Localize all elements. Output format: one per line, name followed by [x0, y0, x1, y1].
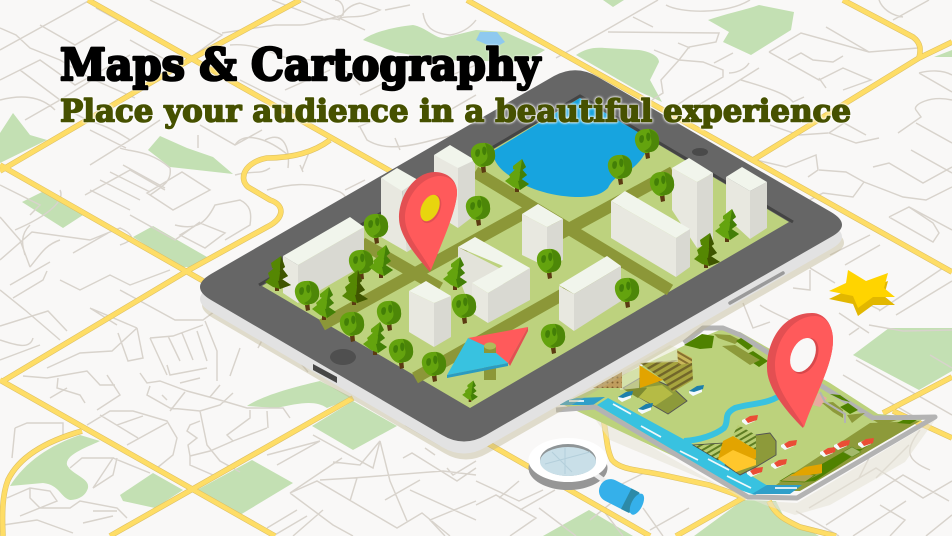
map land: [562, 330, 925, 492]
tablet home button: [330, 349, 356, 365]
star: [829, 270, 895, 316]
map dark green field: [804, 443, 872, 482]
map gray border road: [556, 328, 935, 498]
building: center small: [522, 204, 563, 267]
map coastal blue band: [597, 398, 768, 495]
building: front square: [409, 281, 451, 347]
tablet device: [200, 70, 844, 460]
map coastal blue corner: [752, 485, 802, 494]
title: Maps & Cartography: [60, 40, 541, 91]
tablet screen bevel: [259, 96, 793, 285]
map blue-roof houses: [618, 385, 704, 414]
paper map shadow on the ground: [590, 412, 935, 515]
building: tower far right: [726, 167, 767, 239]
map field block one: [620, 345, 693, 414]
map bottom-right olive land: [768, 421, 920, 491]
building: tall tower right: [672, 158, 713, 248]
tablet shadow: [202, 88, 844, 460]
map red-roof houses: [742, 415, 874, 477]
round trees: [295, 129, 674, 382]
map orange field: [790, 464, 822, 476]
map river: [684, 392, 785, 441]
map striped field: [780, 473, 815, 482]
compass blue edge: [447, 363, 508, 378]
compass hub: [484, 342, 496, 353]
building: tower left of pin: [381, 168, 418, 252]
building: L-shaped: [458, 237, 530, 323]
map white dashes: [569, 401, 797, 488]
lens glass: [540, 447, 596, 476]
compass red needle: [468, 327, 528, 363]
tablet screen land: [262, 98, 789, 408]
map top garden parcels: [684, 334, 917, 425]
tablet volume button: [730, 273, 783, 303]
building: long left: [283, 217, 364, 303]
building: long right: [611, 191, 690, 277]
subtitle: Place your audience in a beautiful experience: [60, 94, 851, 130]
map pin on tablet: [399, 172, 457, 272]
lens rim: [528, 438, 608, 482]
stem: [592, 472, 606, 482]
map coastal blue top: [560, 397, 605, 405]
building: front long: [559, 256, 621, 331]
map field block two: [693, 425, 776, 475]
compass red edge: [508, 327, 528, 366]
magnifying glass: [528, 438, 647, 517]
buildings back row: [283, 145, 767, 347]
tablet face: [200, 70, 842, 442]
compass: [447, 327, 528, 380]
building: tower behind pin: [434, 145, 475, 228]
large map pin: [767, 313, 833, 428]
handle: [595, 475, 647, 517]
compass post: [484, 360, 496, 380]
map brown dotted field: [593, 372, 622, 388]
lens rim side: [528, 446, 608, 490]
tablet side: [200, 82, 842, 454]
small pond: [476, 32, 505, 47]
lens reflected streets: [545, 448, 590, 474]
tablet side slot: [313, 364, 337, 383]
lake: [493, 98, 648, 197]
tablet camera: [692, 148, 708, 156]
pine trees: [265, 159, 739, 402]
map check field: [843, 447, 861, 457]
paper map: [556, 328, 935, 498]
lens inner rim: [540, 444, 596, 476]
compass blue needle: [447, 338, 508, 375]
screen roads: [322, 172, 673, 378]
